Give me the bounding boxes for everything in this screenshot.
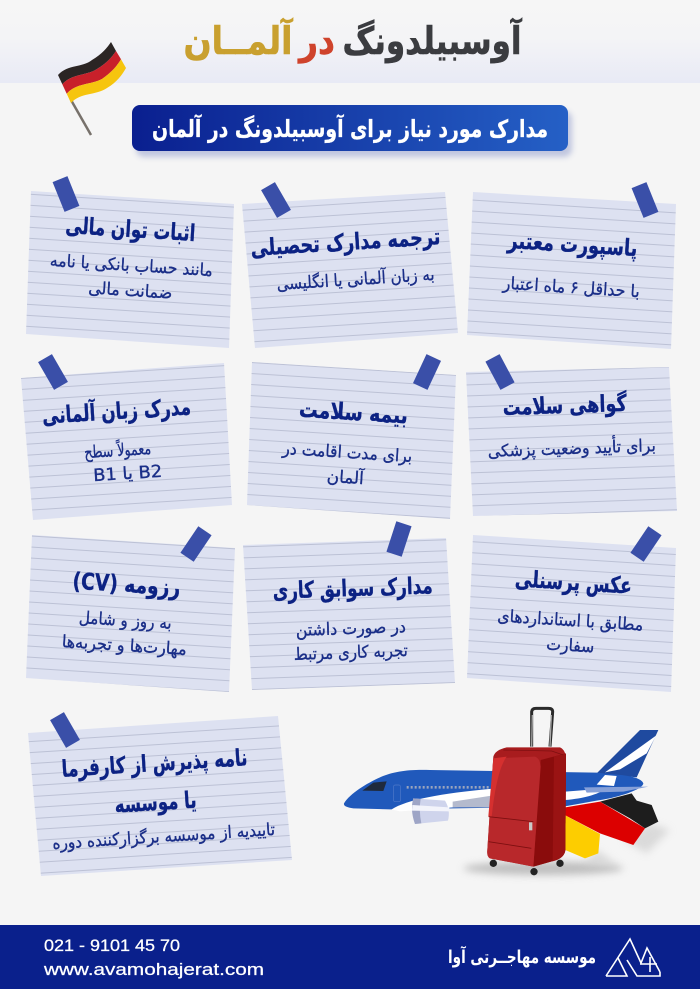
description: در صورت داشتن [296, 617, 406, 641]
heading: ترجمه مدارک تحصیلی [250, 224, 441, 262]
tape [413, 354, 441, 390]
panel: German language certificate [21, 354, 232, 520]
icon: German flag [58, 42, 126, 135]
airplane [344, 730, 658, 824]
panel: translated documents [242, 182, 458, 348]
footer [0, 925, 700, 989]
tape [485, 354, 515, 390]
description: مطابق با استانداردهای [497, 606, 644, 636]
description [83, 436, 163, 486]
description: مهارت‌ها و تجربه‌ها [61, 632, 187, 660]
heading banner [132, 105, 572, 157]
description: به زبان آلمانی یا انگلیسی [276, 263, 435, 295]
contact website: www.avamohajerat.com [43, 961, 264, 979]
description: B2 یا B1 [93, 462, 163, 486]
panel: CV [26, 526, 235, 692]
description: با حداقل ۶ ماه اعتبار [501, 274, 640, 302]
tape [53, 176, 79, 212]
title [184, 17, 522, 64]
title: آلمــان [184, 17, 293, 63]
heading: یا موسسه [114, 787, 197, 819]
description: تجربه کاری مرتبط [294, 641, 408, 665]
description [61, 608, 187, 660]
description: سفارت [546, 635, 595, 657]
tape [261, 182, 291, 218]
description: مانند حساب بانکی یا نامه [49, 251, 213, 281]
heading: رزومه (CV) [72, 569, 181, 601]
heading: بیمه سلامت [298, 397, 409, 429]
title: آوسبیلدونگ [342, 17, 522, 64]
description: برای مدت اقامت در [281, 439, 413, 467]
heading banner: مدارک مورد نیاز برای آوسبیلدونگ در آلمان [152, 114, 548, 143]
heading: مدارک سوابق کاری [272, 573, 433, 605]
panel: health certificate [466, 354, 677, 516]
description: تاییدیه از موسسه برگزارکننده دوره [52, 819, 276, 854]
tape [50, 712, 80, 748]
tape [38, 354, 68, 390]
panel: passport [467, 182, 676, 349]
title: در [297, 19, 335, 63]
tape [180, 526, 212, 562]
header band [0, 0, 700, 83]
description: ضمانت مالی [88, 278, 173, 304]
illustration: plane, suitcase and Germany map [344, 708, 670, 875]
heading: نامه پذیرش از کارفرما [61, 745, 248, 783]
tape [632, 182, 658, 218]
map of Germany [565, 793, 670, 865]
panel: personal photo [467, 526, 676, 692]
floor shadow [463, 862, 623, 875]
panel: employer acceptance letter [28, 712, 292, 876]
heading: پاسپورت معتبر [506, 228, 638, 262]
suitcase [487, 708, 566, 875]
icon: logo [606, 939, 660, 976]
heading: گواهی سلامت [502, 390, 628, 421]
contact phone: 021 - 9101 45 70 [44, 937, 180, 955]
heading [61, 745, 248, 819]
heading: عکس پرسنلی [514, 566, 633, 600]
description: آلمان [326, 465, 366, 489]
description [49, 251, 213, 304]
tape [630, 526, 662, 562]
description [281, 439, 413, 489]
panel: work experience [243, 521, 455, 690]
panel: financial proof [26, 176, 234, 348]
description: معمولاً سطح [83, 436, 152, 463]
description: برای تأیید وضعیت پزشکی [487, 433, 656, 462]
heading: اثبات توان مالی [65, 213, 196, 247]
panel: health insurance [247, 354, 456, 519]
description [294, 617, 408, 665]
description [497, 606, 644, 657]
description: به روز و شامل [78, 608, 172, 634]
organisation name: موسسه مهاجــرتی آوا [448, 945, 596, 968]
heading: مدرک زبان آلمانی [41, 391, 192, 430]
tape [386, 521, 412, 557]
